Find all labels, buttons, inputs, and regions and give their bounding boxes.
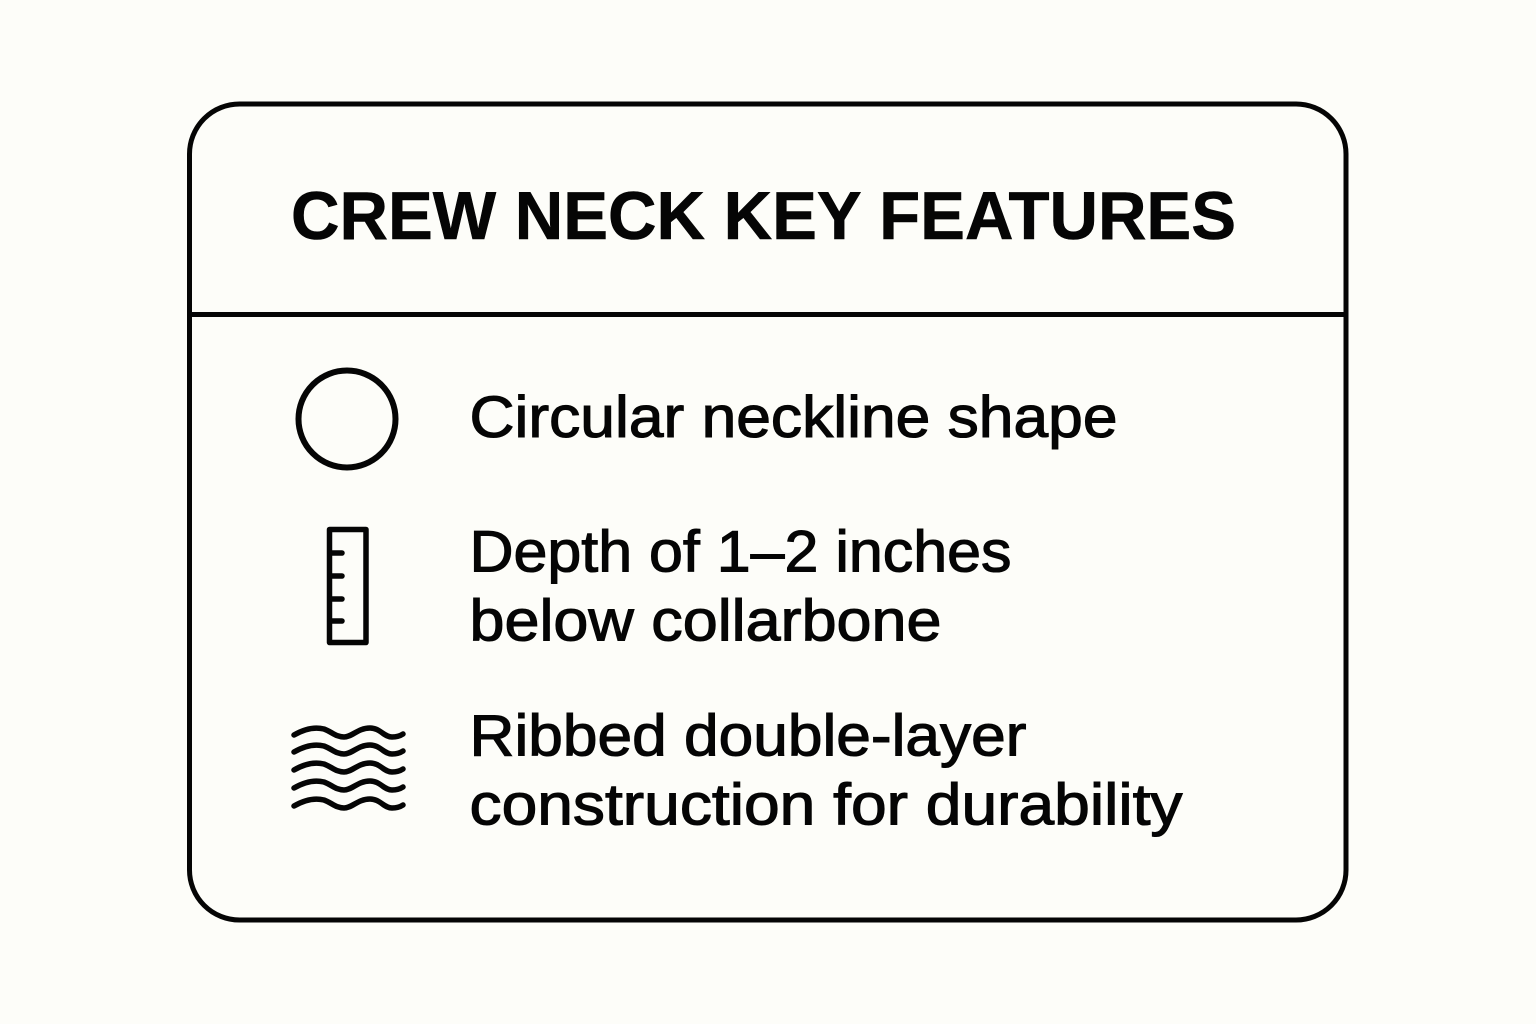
icon: ribbed waves — [294, 728, 403, 808]
title: CREW NECK KEY FEATURES — [291, 178, 1236, 254]
text: depth of neckline — [470, 520, 1012, 654]
text: depth of neckline: Depth of 1–2 inches — [470, 520, 1012, 584]
icon: ruler — [330, 530, 366, 642]
panel: feature card — [190, 104, 1346, 920]
text: ribbed construction: construction for durability — [470, 772, 1182, 838]
icon: circle neckline — [298, 370, 396, 468]
text: ribbed construction: Ribbed double-layer — [470, 704, 1026, 768]
text: ribbed construction — [470, 704, 1182, 838]
text: depth of neckline: below collarbone — [470, 588, 942, 654]
text: circular neckline shape: Circular neckline shape — [470, 385, 1118, 450]
